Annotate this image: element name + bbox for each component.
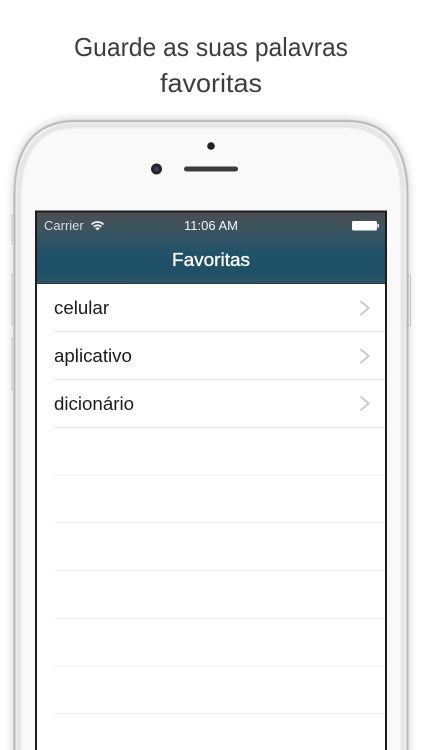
row: aplicativo: aplicativo	[54, 345, 132, 366]
phone bezel highlight	[19, 126, 403, 750]
side button right	[408, 275, 410, 326]
front camera	[151, 164, 162, 174]
row: dicionário	[54, 393, 368, 414]
row: aplicativo	[54, 345, 368, 366]
proximity sensor	[207, 142, 215, 150]
phone mockup	[12, 120, 410, 750]
speaker	[184, 166, 238, 172]
row: celular	[54, 297, 368, 318]
phone outer edge	[14, 121, 408, 750]
row: dicionário: dicionário	[54, 393, 134, 414]
list	[54, 297, 385, 714]
icon: battery	[352, 221, 379, 230]
navigation bar	[37, 212, 385, 284]
icon: wifi	[92, 222, 104, 230]
phone soft outer shadow	[14, 120, 408, 750]
status bar time: 11:06 AM	[184, 218, 238, 233]
phone body	[14, 120, 408, 750]
title	[74, 32, 348, 98]
title: favoritas	[160, 68, 262, 98]
screen content	[37, 284, 385, 750]
row: celular: celular	[54, 297, 109, 318]
screen frame	[35, 210, 387, 750]
title: Guarde as suas palavras	[74, 32, 348, 62]
nav title: Favoritas	[172, 250, 250, 270]
status bar carrier: Carrier	[44, 218, 84, 233]
side buttons left	[12, 215, 14, 390]
